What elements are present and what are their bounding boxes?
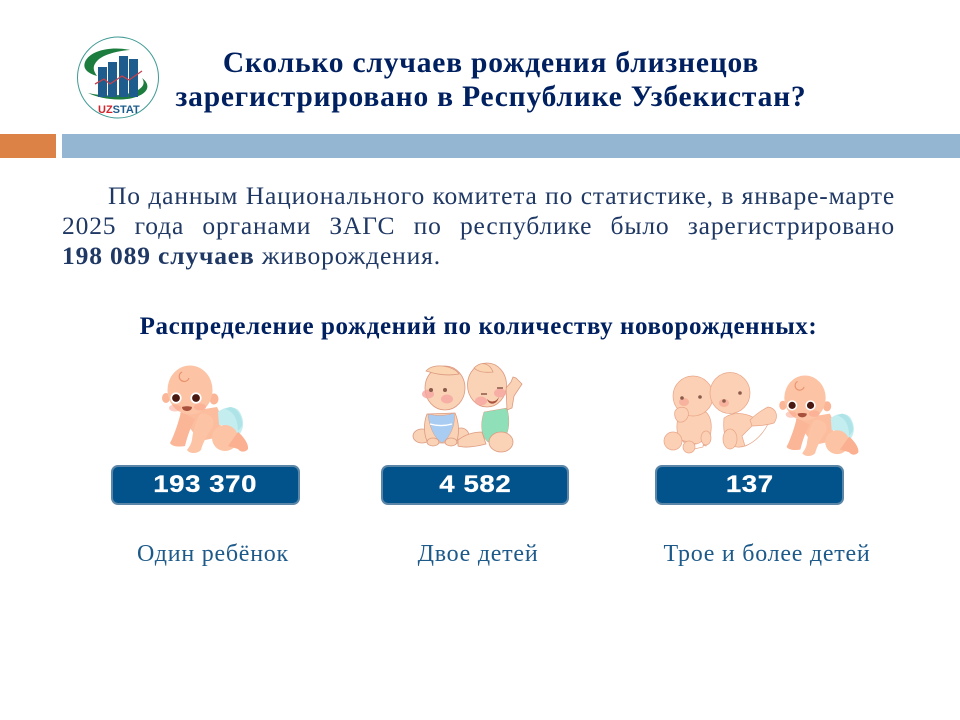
icon: one crawling baby xyxy=(162,366,248,453)
subheading: Распределение рождений по количеству новорожденных: xyxy=(140,313,817,340)
icon: UZSTAT logo: UZSTAT xyxy=(98,104,140,116)
text block: intro paragraph: 198 089 случаев живорождения. xyxy=(62,241,441,270)
label: one child: Один ребёнок xyxy=(137,541,289,567)
icon: UZSTAT logo xyxy=(78,37,158,118)
blue header bar xyxy=(62,134,960,158)
title: Сколько случаев рождения близнецов xyxy=(223,47,759,79)
value: three or more children xyxy=(655,465,844,505)
orange header bar xyxy=(0,134,56,158)
icon: twin babies sitting xyxy=(413,363,522,452)
title: зарегистрировано в Республике Узбекистан? xyxy=(176,81,806,113)
value: two children: 4 582 xyxy=(439,471,511,498)
label: three or more children: Трое и более детей xyxy=(663,541,871,567)
value: three or more children: 137 xyxy=(726,471,773,498)
icon: twins lying xyxy=(664,372,776,453)
label: two children: Двое детей xyxy=(418,541,538,567)
value: one child xyxy=(111,465,300,505)
text block: intro paragraph xyxy=(62,181,895,270)
text block: intro paragraph: По данным Национального комитета по статистике, в январе-марте xyxy=(108,181,895,210)
title xyxy=(176,47,806,113)
value: two children xyxy=(381,465,569,505)
text block: intro paragraph: 2025 года органами ЗАГС по республике было зарегистрировано xyxy=(62,211,895,240)
value: one child: 193 370 xyxy=(154,471,257,498)
icon: crawling baby in trio xyxy=(779,375,858,456)
